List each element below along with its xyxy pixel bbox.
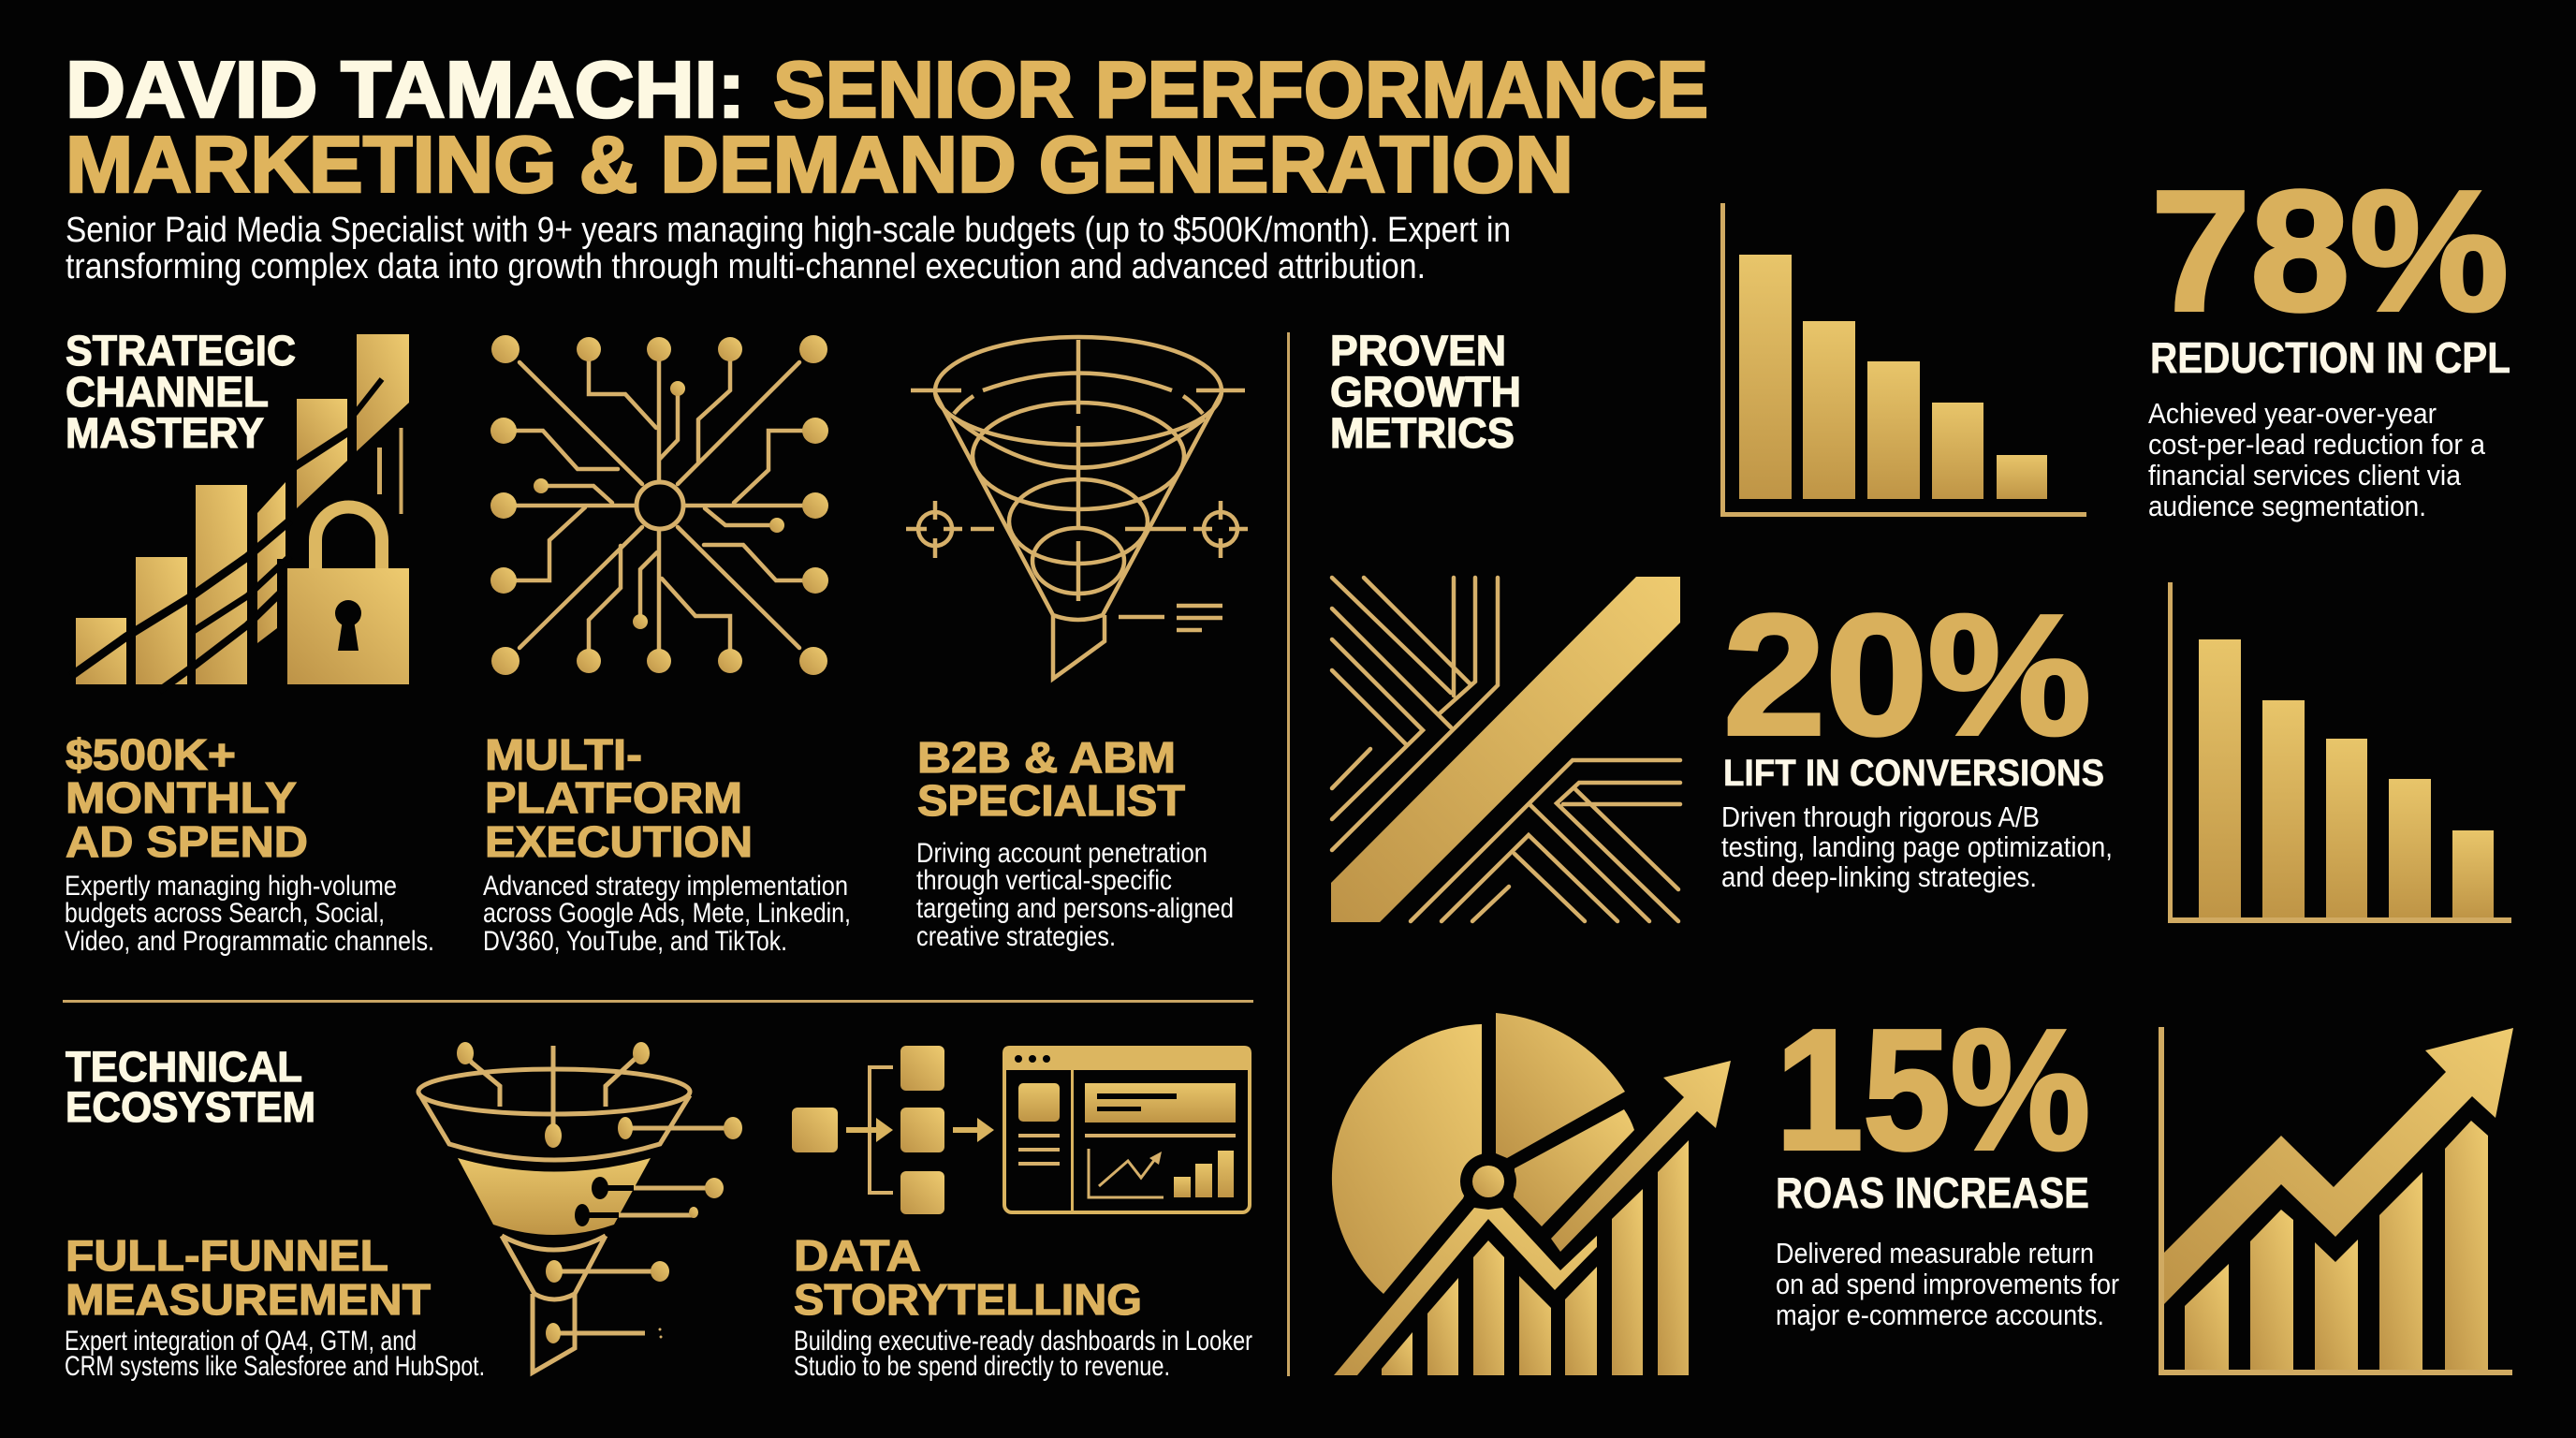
padlock <box>287 507 409 684</box>
bar chart: conversions <box>2168 582 2511 923</box>
label: reduction in CPL: REDUCTION IN CPL <box>2150 333 2510 382</box>
description: multi-platform: DV360, YouTube, and TikTok. <box>483 926 787 957</box>
heading: multi-platform execution <box>485 730 753 866</box>
heading: data storytelling: DATA <box>794 1231 921 1280</box>
description: conversions: testing, landing page optimization, <box>1721 830 2113 863</box>
icon: multi-platform network <box>490 335 828 675</box>
description: CPL: cost-per-lead reduction for a <box>2148 428 2486 461</box>
description: ad spend: Video, and Programmatic channels. <box>65 926 434 957</box>
panel: strategic channel mastery <box>66 327 409 691</box>
description: data storytelling <box>794 1326 1252 1382</box>
description: B2B: targeting and persons-aligned <box>916 893 1234 924</box>
icon: rising bars with padlock <box>71 334 409 691</box>
heading: proven growth metrics <box>1330 327 1521 457</box>
heading: multi-platform execution: MULTI- <box>485 730 642 779</box>
description: ROAS <box>1776 1237 2119 1331</box>
heading: $500K+ monthly ad spend: $500K+ <box>66 730 236 779</box>
description: full-funnel: Expert integration of QA4, GTM, and <box>65 1326 417 1357</box>
metric: 78% reduction in CPL <box>2148 154 2510 522</box>
description: conversions: Driven through rigorous A/B <box>1721 800 2040 833</box>
stat: 20%: 20% <box>1723 579 2091 770</box>
description: multi-platform: across Google Ads, Mete, Linkedin, <box>483 898 851 929</box>
description: ad spend <box>65 871 434 957</box>
dashboard window <box>1003 1046 1251 1212</box>
heading: $500K+ monthly ad spend: MONTHLY <box>66 773 297 822</box>
description: conversions <box>1721 800 2113 893</box>
intro text <box>66 211 1511 286</box>
title <box>66 46 1708 210</box>
metric: 20% lift in conversions <box>1721 579 2113 893</box>
heading: full-funnel measurement: MEASUREMENT <box>66 1275 431 1324</box>
description: ROAS: Delivered measurable return <box>1776 1237 2094 1269</box>
title: DAVID TAMACHI: <box>66 46 745 135</box>
description: CPL: financial services client via <box>2148 459 2462 492</box>
heading: proven growth metrics: PROVEN <box>1330 327 1506 374</box>
description: B2B: through vertical-specific <box>916 865 1172 896</box>
stat: 78%: 78% <box>2151 154 2509 346</box>
heading: strategic channel mastery: MASTERY <box>66 409 264 457</box>
icon: diagonal band and circuit lines <box>1331 577 1680 922</box>
heading: $500K+ monthly ad spend <box>66 730 308 866</box>
description: ad spend: budgets across Search, Social, <box>65 898 385 929</box>
description: data storytelling: Studio to be spend directly to revenue. <box>794 1351 1170 1382</box>
heading: technical ecosystem: ECOSYSTEM <box>66 1083 315 1131</box>
icon: B2B targeting funnel <box>906 337 1248 679</box>
description: CPL <box>2148 397 2486 522</box>
intro text: Senior Paid Media Specialist with 9+ years managing high-scale budgets (up to $500K/month). Expert in <box>66 211 1511 250</box>
description: multi-platform <box>483 871 851 957</box>
title: MARKETING & DEMAND GENERATION <box>66 121 1573 210</box>
heading: technical ecosystem: TECHNICAL <box>66 1043 302 1091</box>
panel: technical ecosystem <box>65 1042 1252 1382</box>
description: full-funnel <box>65 1326 485 1382</box>
description: CPL: audience segmentation. <box>2148 490 2426 522</box>
description: data storytelling: Building executive-ready dashboards in Looker <box>794 1326 1252 1357</box>
description: conversions: and deep-linking strategies. <box>1721 860 2037 893</box>
description: B2B: creative strategies. <box>916 921 1116 952</box>
icon: data flow to dashboard <box>792 1046 1251 1214</box>
stat: 15%: 15% <box>1776 993 2090 1185</box>
description: CPL: Achieved year-over-year <box>2148 397 2437 430</box>
heading: B2B & ABM specialist: B2B & ABM <box>917 733 1176 782</box>
panel: B2B and ABM specialist <box>916 733 1234 952</box>
metric: 15% ROAS increase <box>1776 993 2119 1331</box>
heading: strategic channel mastery <box>66 327 296 457</box>
description: B2B: Driving account penetration <box>916 838 1208 869</box>
icon: pie chart with growth arrow <box>1332 1013 1731 1375</box>
heading: B2B & ABM specialist <box>917 733 1185 825</box>
description: ROAS: major e-commerce accounts. <box>1776 1299 2104 1331</box>
heading: proven growth metrics: GROWTH <box>1330 368 1521 416</box>
heading: proven growth metrics: METRICS <box>1330 409 1515 457</box>
heading: multi-platform execution: PLATFORM <box>485 773 742 822</box>
heading: B2B & ABM specialist: SPECIALIST <box>917 776 1185 825</box>
label: lift in conversions: LIFT IN CONVERSIONS <box>1723 753 2104 794</box>
panel: multi-platform execution <box>483 730 851 957</box>
label: ROAS increase: ROAS INCREASE <box>1776 1168 2089 1217</box>
heading: $500K+ monthly ad spend: AD SPEND <box>66 817 308 866</box>
icon: full-funnel measurement funnel <box>418 1042 742 1372</box>
heading: strategic channel mastery: STRATEGIC <box>66 327 296 374</box>
chart: ROAS growth arrow and bars <box>2159 1027 2513 1375</box>
heading: multi-platform execution: EXECUTION <box>485 817 753 866</box>
description: ad spend: Expertly managing high-volume <box>65 871 397 902</box>
bar chart: falling cost per lead <box>1720 203 2086 517</box>
description: multi-platform: Advanced strategy implementation <box>483 871 848 902</box>
heading: strategic channel mastery: CHANNEL <box>66 368 269 416</box>
heading: technical ecosystem <box>66 1043 315 1131</box>
description: ROAS: on ad spend improvements for <box>1776 1268 2119 1300</box>
heading: full-funnel measurement: FULL-FUNNEL <box>66 1231 388 1280</box>
title: SENIOR PERFORMANCE <box>773 46 1708 135</box>
description: full-funnel: CRM systems like Salesforee and HubSpot. <box>65 1351 485 1382</box>
heading: full-funnel measurement <box>66 1231 431 1324</box>
description: B2B <box>916 838 1234 952</box>
heading: data storytelling: STORYTELLING <box>794 1275 1142 1324</box>
heading: data storytelling <box>794 1231 1142 1324</box>
panel: monthly ad spend <box>65 730 434 957</box>
intro text: transforming complex data into growth through multi-channel execution and advanced attribution. <box>66 247 1426 286</box>
